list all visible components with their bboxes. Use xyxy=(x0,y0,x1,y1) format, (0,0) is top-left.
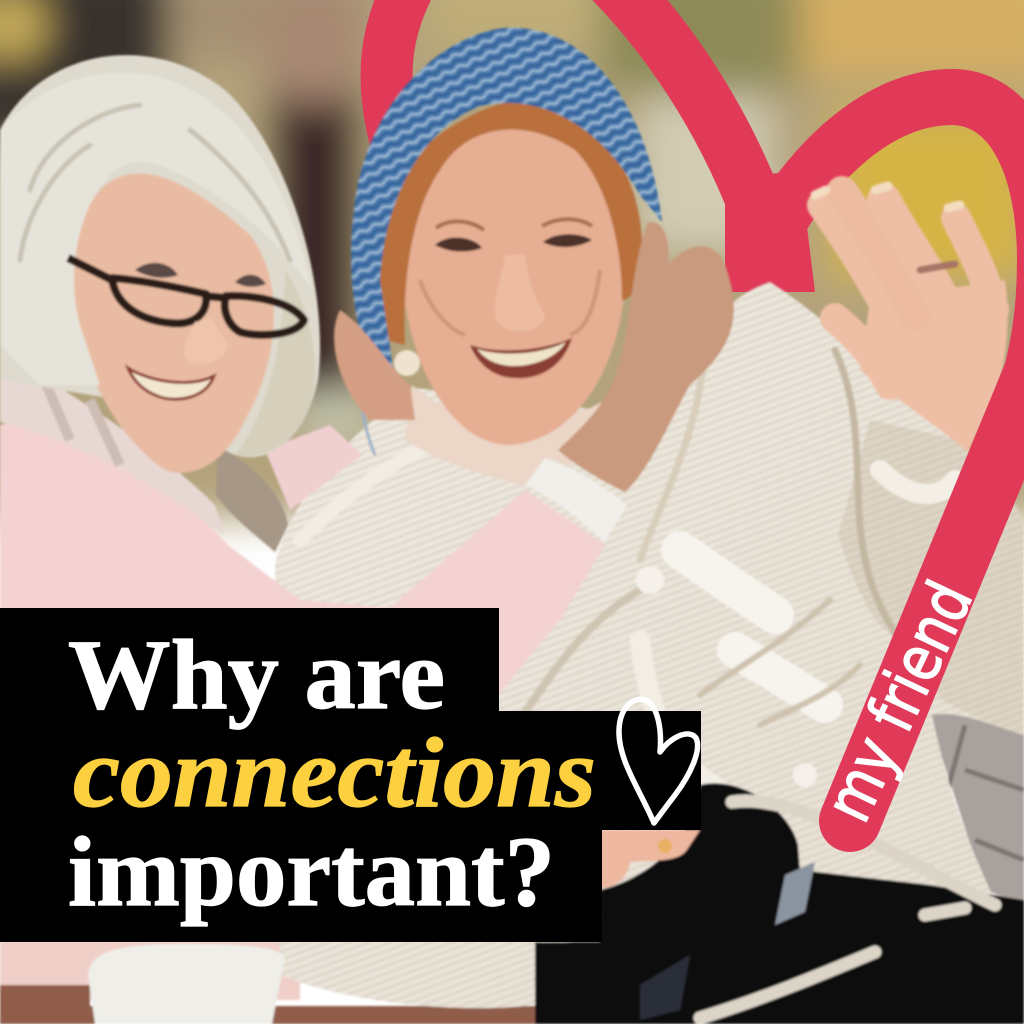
sweater knit cables xyxy=(300,300,955,790)
left woman: hair back xyxy=(0,55,320,457)
left woman: hidden hand xyxy=(334,310,415,420)
left woman: pink jumper xyxy=(0,423,605,760)
right woman: earring xyxy=(394,350,420,376)
painted nail xyxy=(658,839,672,853)
left woman: fringe xyxy=(0,73,312,385)
right woman: facial features xyxy=(420,219,600,378)
left woman: far arm sleeve xyxy=(265,425,362,510)
patterned lining xyxy=(775,862,815,925)
bottom table and pink sleeve xyxy=(0,930,560,1024)
left woman: hand on friend's neck xyxy=(558,222,734,492)
sweater beige sleeve folds xyxy=(838,420,1024,735)
left woman: scarf xyxy=(0,350,225,535)
puffer jacket seams xyxy=(945,725,1024,860)
blurred cafe background xyxy=(0,0,1024,520)
scarf plaid bands xyxy=(40,370,120,465)
right woman: raised waving hand xyxy=(815,186,1008,452)
left woman: side hair xyxy=(235,270,315,456)
right woman: turtleneck xyxy=(405,385,605,492)
left woman: eyes xyxy=(135,263,266,287)
black bag xyxy=(535,783,1024,1024)
title line: Why are: Why are xyxy=(68,619,445,730)
left woman: glasses xyxy=(68,258,304,335)
right woman: red hair xyxy=(364,98,642,345)
left woman: face xyxy=(70,174,274,473)
glossy bag patch xyxy=(640,955,690,1020)
left woman: plaid scarf xyxy=(216,445,288,552)
title line: important?: important? xyxy=(68,816,555,927)
white cup xyxy=(88,944,285,1024)
right woman: blue knitted beanie xyxy=(351,28,662,388)
left woman: nose and smile xyxy=(128,318,228,399)
left woman: white cuff xyxy=(525,458,627,542)
right woman: cream cable-knit sweater xyxy=(275,282,1024,1008)
fingers at bottom xyxy=(600,830,700,888)
icon: hand-drawn white heart xyxy=(619,699,698,823)
title line: connections: connections xyxy=(73,717,596,828)
left woman: hair strands xyxy=(20,105,290,260)
beanie string xyxy=(362,375,375,455)
bag straps xyxy=(700,801,995,1018)
grey puffer jacket xyxy=(925,705,1024,905)
right woman: face xyxy=(400,112,625,445)
brand tag: my friend: my friend xyxy=(812,571,988,833)
title block: black stepped panel xyxy=(0,608,701,942)
heart outline: front tail with brand tag xyxy=(812,360,1024,833)
heart outline: rear section behind the people xyxy=(387,0,1024,460)
sweater knit texture xyxy=(275,282,1024,1008)
